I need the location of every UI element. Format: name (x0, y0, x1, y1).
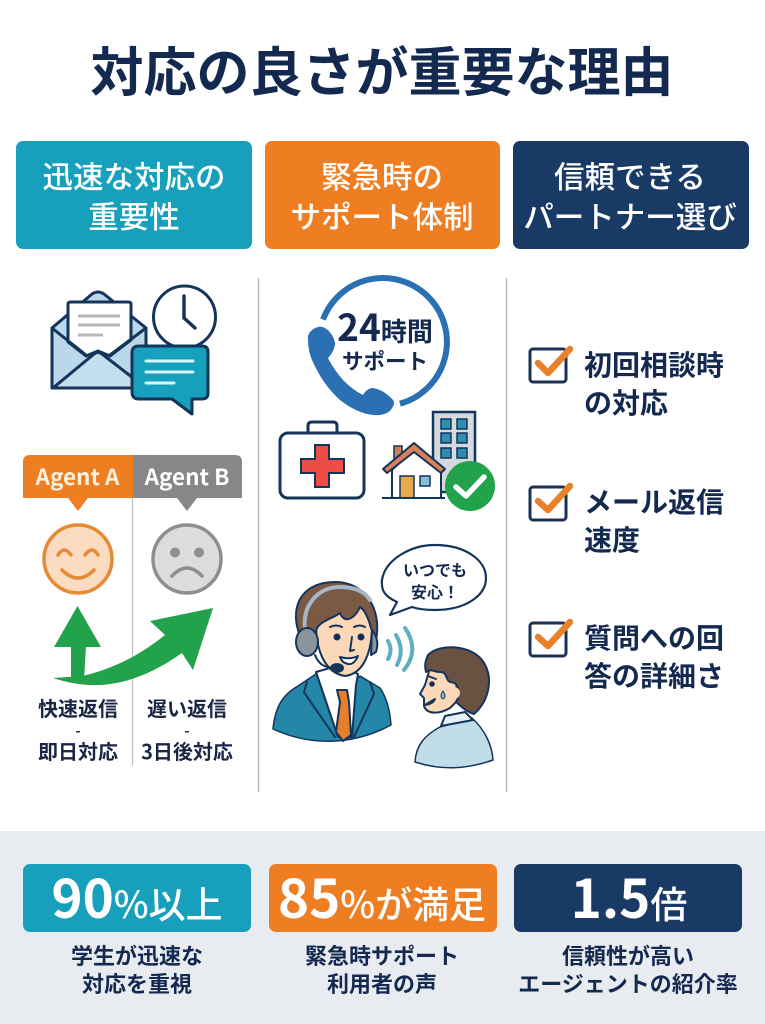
panel: header emergency support (265, 141, 500, 249)
comparison: agent labels: Agent B (144, 460, 229, 492)
illustration: student (415, 647, 493, 768)
stat: 85 percent: 85%が満足 (278, 858, 486, 934)
icon: 24 hour support phone ring (308, 278, 447, 415)
icon: sad face (153, 525, 221, 593)
caption: referral rate: エージェントの紹介率 (518, 967, 738, 999)
icon: envelope, clock and chat bubble (52, 286, 216, 414)
callout: speech bubble: 安心！ (411, 579, 459, 603)
checklist item: email reply speed (530, 481, 724, 559)
panel: header emergency support: 緊急時の (321, 153, 443, 197)
checklist item: email reply speed: 速度 (584, 519, 640, 559)
icon: sound waves (388, 628, 412, 670)
panel: header emergency support: サポート体制 (290, 193, 474, 237)
panel: header rapid response (16, 141, 252, 249)
caption: referral rate: 信頼性が高い (562, 939, 694, 971)
icon: first aid kit (280, 422, 364, 498)
icon: smiling face (44, 525, 112, 593)
stat: 1.5 times (514, 858, 742, 934)
checklist item: answer detail: 質問への回 (584, 617, 724, 657)
panel: header reliable partner (513, 141, 749, 249)
panel: statistics band (0, 831, 765, 1024)
caption: emergency users: 緊急時サポート (305, 939, 459, 971)
title: 対応の良さが重要な理由 (90, 31, 674, 107)
icon: 24 hour support phone ring: 24時間 (337, 298, 433, 352)
text: slow reply: 遅い返信 (147, 693, 227, 722)
comparison: agent labels (23, 455, 242, 511)
text: fast reply: 即日対応 (38, 736, 118, 765)
text: slow reply: 3日後対応 (141, 736, 233, 765)
callout: speech bubble (382, 545, 486, 615)
panel: header rapid response: 迅速な対応の (42, 153, 226, 197)
panel: header reliable partner: 信頼できる (554, 153, 706, 197)
panel: header reliable partner: パートナー選び (523, 193, 737, 237)
stat: 90 percent: 90%以上 (51, 858, 223, 934)
checklist item: first consultation (530, 344, 724, 422)
callout: speech bubble: いつでも (403, 557, 467, 581)
text: fast reply: 快速返信 (38, 693, 118, 722)
panel: header rapid response: 重要性 (88, 193, 180, 237)
checklist item: first consultation: 初回相談時 (584, 344, 724, 384)
checklist item: first consultation: の対応 (584, 382, 668, 422)
checklist item: answer detail: 答の詳細さ (584, 655, 724, 695)
text: slow reply: - (184, 721, 190, 741)
comparison: agent labels: Agent A (35, 460, 120, 492)
caption: emergency users: 利用者の声 (327, 967, 437, 999)
caption: students: 対応を重視 (82, 967, 192, 999)
text: fast reply: - (75, 721, 81, 741)
checklist item: answer detail (530, 617, 724, 695)
stat: 1.5 times: 1.5倍 (571, 858, 687, 934)
icon: house and building with check (382, 412, 495, 511)
caption: students: 学生が迅速な (71, 939, 203, 971)
icon: 24 hour support phone ring: サポート (342, 345, 428, 376)
arrows: green growth arrows (53, 606, 213, 685)
checklist item: email reply speed: メール返信 (584, 481, 724, 521)
illustration: operator with headset (273, 582, 391, 741)
